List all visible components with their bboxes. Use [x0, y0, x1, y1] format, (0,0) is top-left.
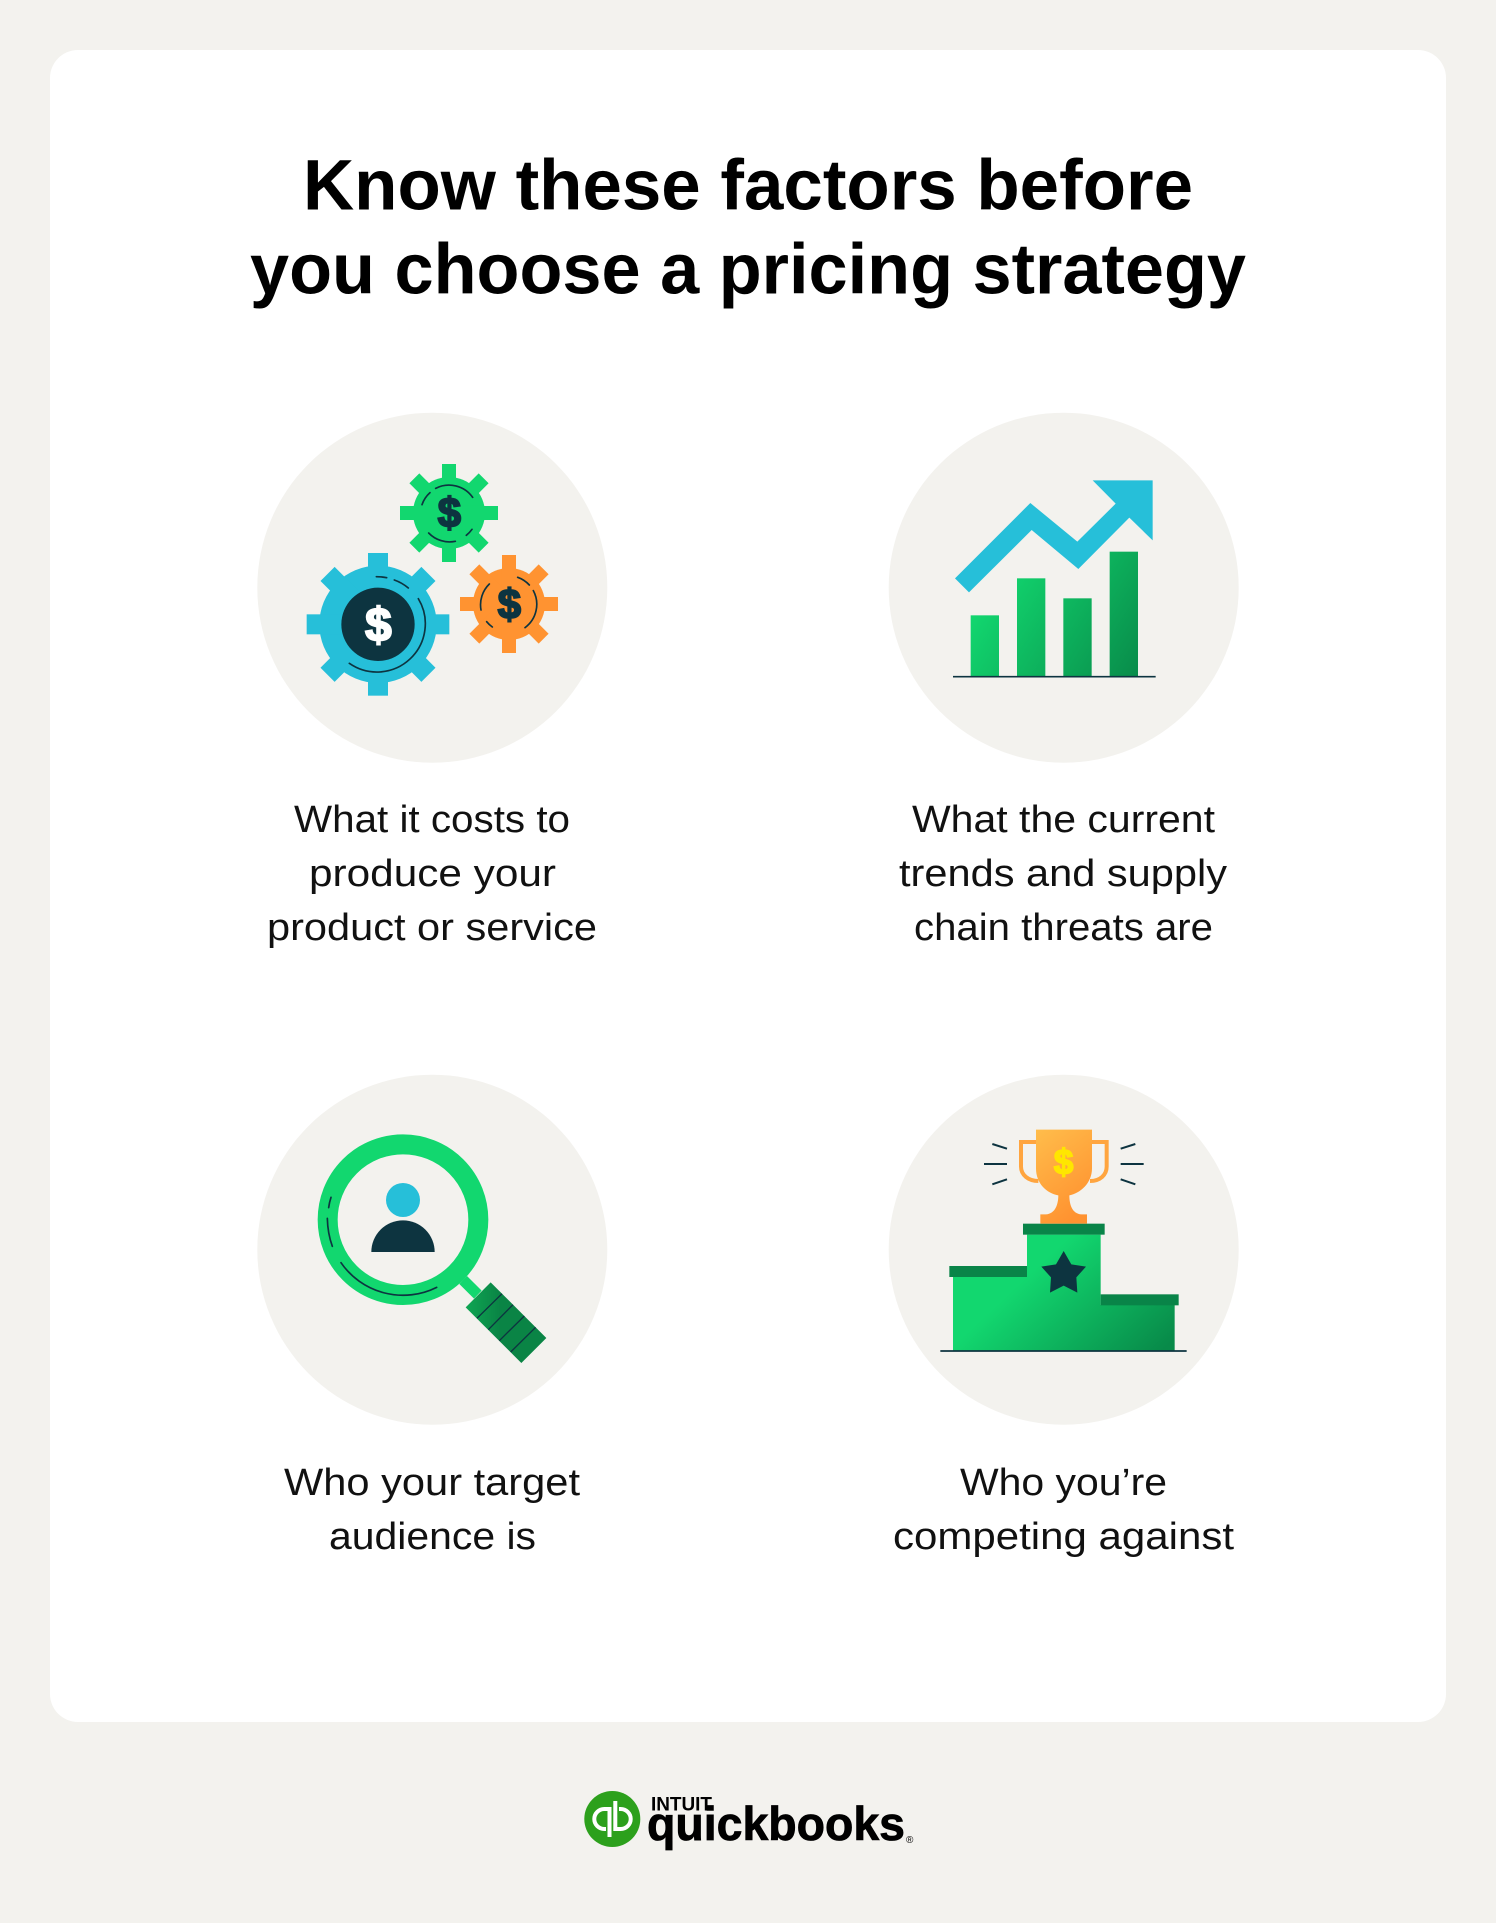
title: you choose a pricing strategy [250, 230, 1246, 310]
caption: costs: produce your [309, 853, 556, 895]
caption: costs: product or service [267, 907, 597, 949]
caption: costs [267, 799, 597, 949]
caption: trends: chain threats are [914, 907, 1213, 949]
magnifier handle [466, 1282, 546, 1363]
chart artwork [953, 480, 1156, 677]
icon background circle [257, 1075, 607, 1425]
green gear: $ [438, 489, 461, 536]
panel: competition [889, 1075, 1239, 1558]
icon: qb badge [584, 1791, 640, 1847]
trophy [1021, 1130, 1107, 1224]
icon: gears with dollar signs [257, 413, 607, 763]
icon background circle [257, 413, 607, 763]
panel: trends and supply chain [889, 413, 1239, 949]
person [371, 1183, 435, 1252]
magnifier ring [328, 1144, 478, 1295]
caption: trends: trends and supply [899, 853, 1227, 895]
orange gear: $ [498, 580, 521, 627]
caption: audience: audience is [329, 1516, 536, 1558]
caption: trends: What the current [912, 799, 1215, 841]
podium artwork [940, 1130, 1187, 1351]
trend arrow [955, 480, 1153, 592]
gears artwork [307, 464, 558, 696]
trophy: $ [1054, 1143, 1073, 1182]
caption: audience [284, 1462, 580, 1558]
green gear [400, 464, 498, 562]
caption: competition: competing against [893, 1516, 1234, 1558]
magnifier neck [459, 1276, 482, 1299]
bars [971, 552, 1138, 676]
caption: audience: Who your target [284, 1462, 580, 1504]
magnifier artwork [327, 1144, 546, 1363]
blue gear: $ [365, 599, 392, 652]
caption: competition: Who you’re [960, 1462, 1167, 1504]
panel: target audience [257, 1075, 607, 1558]
title: Know these factors before [303, 146, 1193, 226]
wordmark: INTUIT [651, 1794, 712, 1816]
caption: competition [893, 1462, 1234, 1558]
caption: trends [899, 799, 1227, 949]
axis line [953, 674, 1156, 679]
wordmark: ® [906, 1835, 914, 1846]
caption: costs: What it costs to [294, 799, 570, 841]
icon: magnifying glass over person [257, 1075, 607, 1425]
shine rays [984, 1144, 1144, 1184]
icon background circle [889, 413, 1239, 763]
icon: rising bar chart [889, 413, 1239, 763]
logo: Intuit QuickBooks [584, 1791, 914, 1850]
panel: production costs [257, 413, 607, 949]
title [250, 146, 1246, 310]
icon background circle [889, 1075, 1239, 1425]
orange gear [460, 555, 558, 653]
lens highlight arcs [327, 1197, 437, 1295]
icon: trophy on podium [889, 1075, 1239, 1425]
podium [940, 1224, 1187, 1351]
blue gear [307, 553, 449, 696]
wordmark: quickbooks [647, 1797, 905, 1850]
